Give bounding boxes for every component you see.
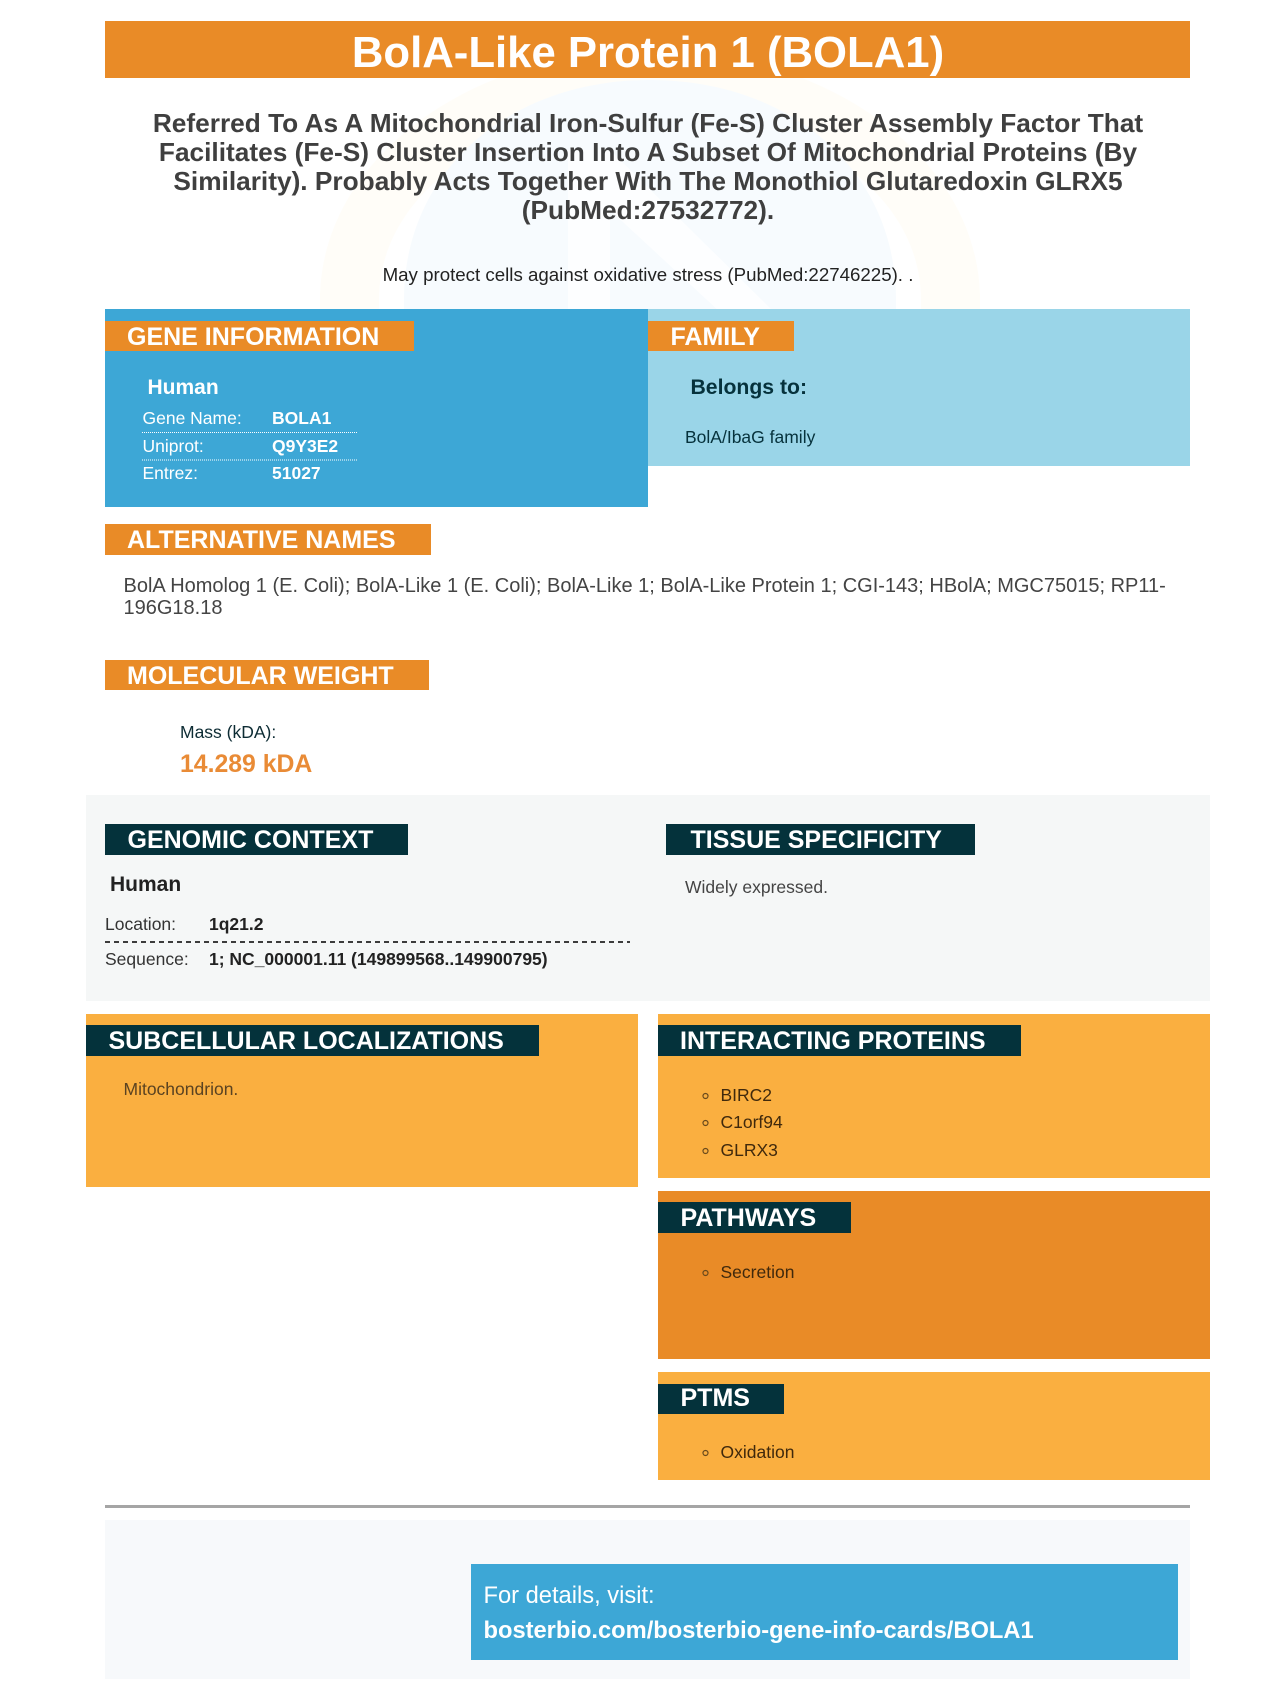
protein list: GLRX3	[720, 1140, 778, 1160]
heading: alternative names: ALTERNATIVE NAMES	[127, 526, 396, 554]
pathway list: Secretion	[720, 1262, 794, 1282]
heading: family: FAMILY	[670, 323, 760, 351]
heading: interacting proteins: INTERACTING PROTEINS	[680, 1027, 986, 1055]
function summary heading	[153, 108, 1143, 225]
panel: pathways	[658, 1191, 1210, 1359]
gene details table: Q9Y3E2	[272, 436, 338, 456]
heading: pathways	[658, 1202, 851, 1233]
protein list	[703, 1085, 783, 1160]
alternative names text: BolA Homolog 1 (E. Coli); BolA-Like 1 (E. Coli); BolA-Like 1; BolA-Like Protein 1; CGI-143; HBolA; MGC75015; RP11-	[124, 575, 1166, 597]
callout: details link: bosterbio.com/bosterbio-gene-info-cards/BOLA1	[484, 1618, 1034, 1644]
alternative names text: 196G18.18	[124, 597, 222, 619]
gene details table: 51027	[272, 463, 321, 483]
heading: gene information: GENE INFORMATION	[127, 323, 379, 351]
molecular weight value: 14.289 kDA	[180, 751, 312, 778]
watermark logo	[320, 50, 980, 312]
heading: ptms	[658, 1384, 784, 1414]
genomic details: Sequence:	[105, 949, 189, 969]
molecular weight value	[180, 722, 312, 778]
title banner	[105, 21, 1190, 78]
molecular weight value: Mass (kDA):	[180, 722, 276, 742]
panel: footer	[105, 1520, 1190, 1679]
heading: genomic context: GENOMIC CONTEXT	[128, 826, 373, 854]
localization text: Mitochondrion.	[124, 1079, 238, 1099]
tissue specificity text: Widely expressed.	[685, 877, 828, 897]
gene details table	[142, 376, 357, 483]
panel: interacting proteins	[658, 1014, 1210, 1178]
callout: details link	[471, 1564, 1178, 1660]
genomic details: Human	[110, 873, 181, 896]
heading: family	[648, 321, 794, 351]
family text: Belongs to:	[690, 376, 807, 399]
ptm list: Oxidation	[720, 1442, 794, 1462]
family text: BolA/IbaG family	[685, 427, 816, 447]
function summary heading: (PubMed:27532772).	[522, 195, 774, 225]
gene details table: Uniprot:	[142, 436, 204, 456]
gene details table: Gene Name:	[142, 408, 242, 428]
heading: pathways: PATHWAYS	[680, 1204, 816, 1232]
genomic details	[105, 873, 630, 969]
callout: details link: For details, visit:	[484, 1583, 655, 1609]
function summary heading: Similarity). Probably Acts Together With The Monothiol Glutaredoxin GLRX5	[173, 166, 1123, 196]
heading: tissue specificity: TISSUE SPECIFICITY	[690, 826, 942, 854]
heading: subcellular localizations: SUBCELLULAR LOCALIZATIONS	[108, 1027, 504, 1055]
panel: subcellular localizations	[86, 1014, 638, 1187]
function summary heading: Facilitates (Fe-S) Cluster Insertion Into A Subset Of Mitochondrial Proteins (By	[159, 137, 1137, 167]
function note: May protect cells against oxidative stress (PubMed:22746225). .	[383, 264, 913, 285]
family text	[685, 376, 816, 447]
panel: ptms	[658, 1372, 1210, 1480]
panel: gene information	[105, 309, 648, 507]
gene details table: Human	[148, 376, 219, 399]
function summary heading: Referred To As A Mitochondrial Iron-Sulfur (Fe-S) Cluster Assembly Factor That	[153, 108, 1143, 138]
title banner: BolA-Like Protein 1 (BOLA1)	[352, 28, 944, 77]
genomic details: Location:	[105, 914, 176, 934]
gene details table: BOLA1	[272, 408, 332, 428]
panel: family	[648, 309, 1190, 466]
genomic details: 1; NC_000001.11 (149899568..149900795)	[209, 949, 548, 969]
genomic details: 1q21.2	[209, 914, 264, 934]
gene details table: Entrez:	[142, 463, 198, 483]
alternative names text	[124, 575, 1166, 619]
protein list: C1orf94	[720, 1112, 783, 1132]
heading: ptms: PTMS	[680, 1384, 750, 1412]
panel: genomic context and tissue specificity	[86, 795, 1210, 1001]
heading: molecular weight: MOLECULAR WEIGHT	[127, 662, 394, 690]
protein list: BIRC2	[720, 1085, 772, 1105]
